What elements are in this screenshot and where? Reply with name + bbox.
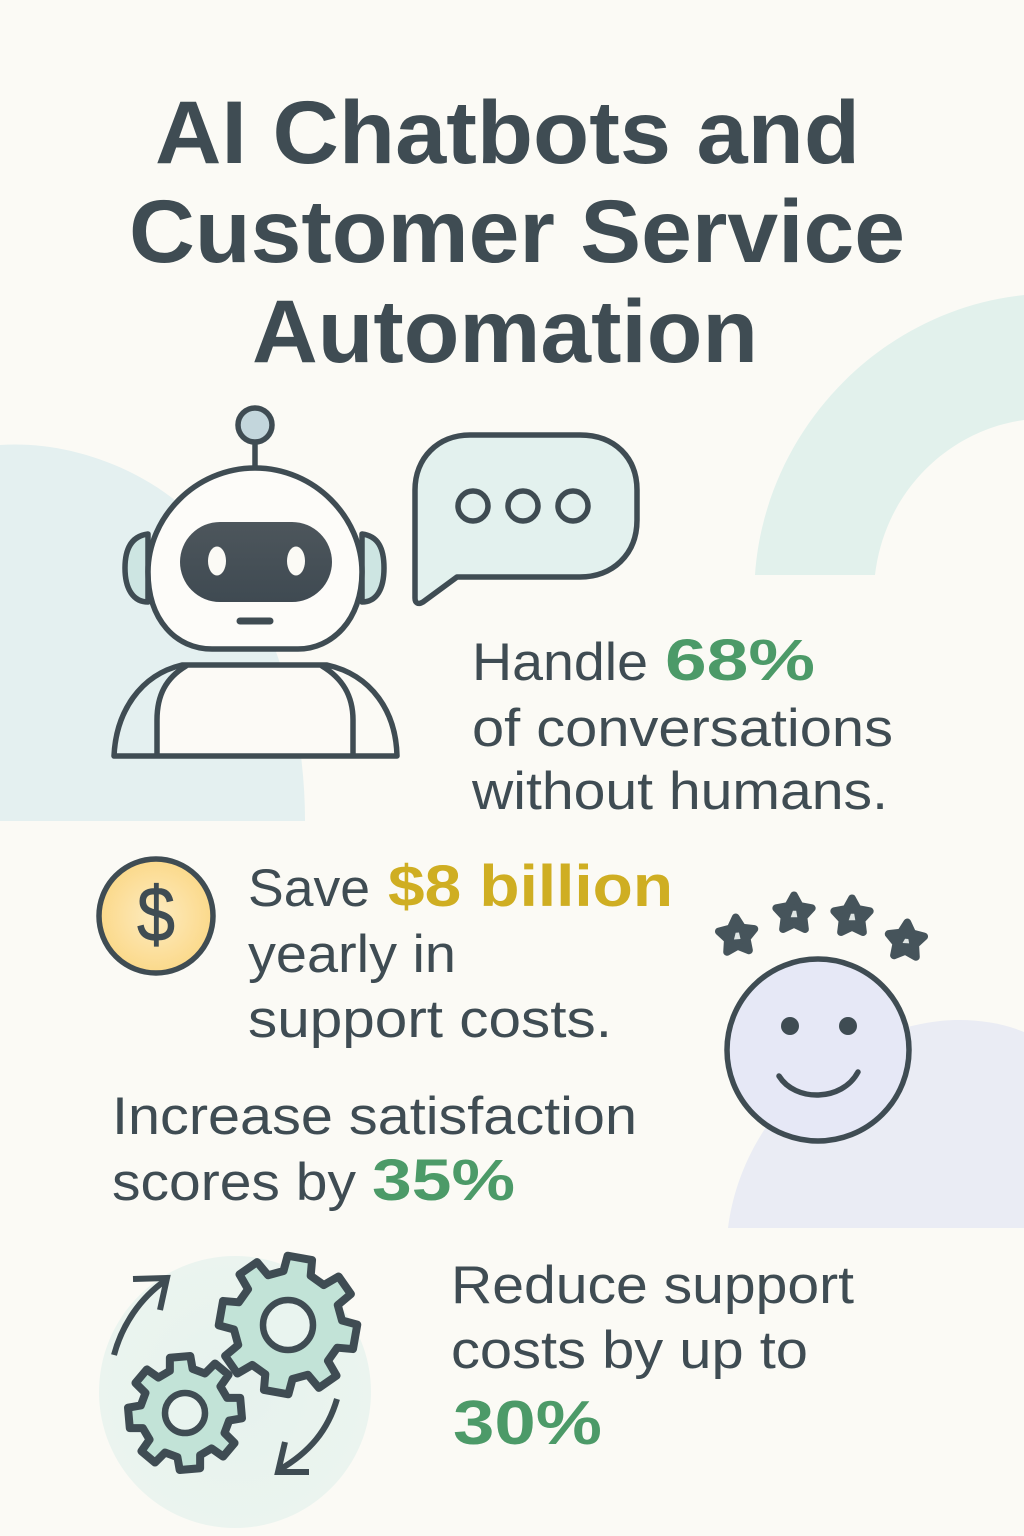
text: save $8 billion <box>248 854 673 1049</box>
text: handle 68%: without humans. <box>471 762 888 821</box>
text: increase satisfaction: 35% <box>372 1148 515 1213</box>
text: increase satisfaction: Increase satisfaction <box>112 1087 637 1146</box>
background shape: lavender blob <box>728 1020 1024 1228</box>
text: handle 68%: 68% <box>665 628 815 693</box>
text: save $8 billion: Save <box>248 859 370 918</box>
icon: dollar coin <box>99 859 213 973</box>
text: increase satisfaction <box>112 1087 637 1213</box>
title: Customer Service <box>129 181 905 281</box>
icon: stars <box>718 895 925 957</box>
text: handle 68%: of conversations <box>472 699 893 758</box>
text: reduce support costs: Reduce support <box>451 1256 854 1315</box>
text: handle 68%: Handle <box>472 633 648 692</box>
icon: speech bubble <box>415 435 637 603</box>
title <box>129 82 905 381</box>
title: Automation <box>252 281 758 381</box>
text: save $8 billion: yearly in <box>248 925 456 984</box>
icon: robot <box>114 408 397 756</box>
icon: smiley face <box>727 959 909 1141</box>
text: increase satisfaction: scores by <box>112 1153 357 1212</box>
text: save $8 billion: support costs. <box>248 990 612 1049</box>
text: handle 68% <box>471 628 893 821</box>
icon: gears with arrows <box>99 1246 371 1528</box>
text: reduce support costs <box>451 1256 854 1458</box>
text: reduce support costs: costs by up to <box>451 1321 808 1380</box>
title: AI Chatbots and <box>155 82 860 182</box>
background shape: right mint arc <box>755 295 1024 575</box>
text: save $8 billion: $8 billion <box>388 854 673 919</box>
text: reduce support costs: 30% <box>453 1389 602 1458</box>
icon: dollar coin: $ <box>137 870 175 958</box>
background shape: left blue blob <box>0 444 305 821</box>
